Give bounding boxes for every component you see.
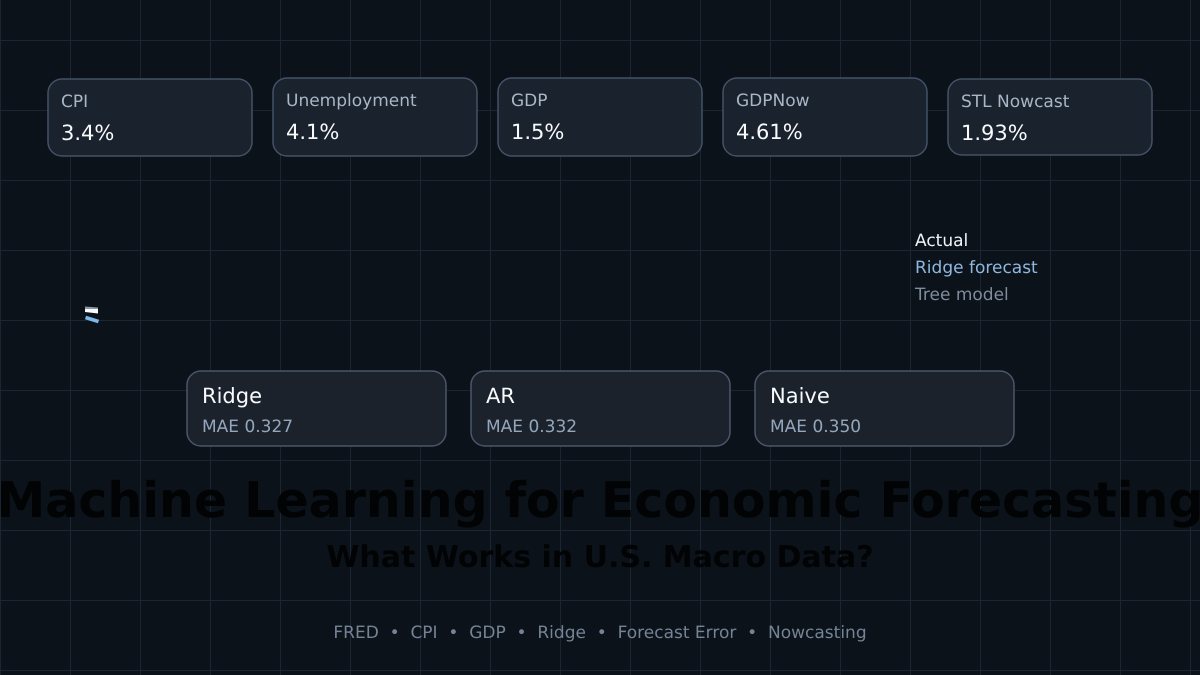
chart legend <box>914 231 1038 305</box>
panel: Ridge model card <box>187 371 446 446</box>
panel: STL Nowcast stat card: 1.93% <box>961 121 1028 145</box>
panel: Unemployment stat card <box>273 78 477 156</box>
chart legend: Actual <box>915 231 968 251</box>
panel: Unemployment stat card: Unemployment <box>286 91 417 111</box>
panel: CPI stat card <box>48 79 252 156</box>
panel: Naive model card <box>755 371 1014 446</box>
panel: STL Nowcast stat card: STL Nowcast <box>961 92 1070 112</box>
panel: AR model card: AR <box>486 384 515 408</box>
panel: GDP stat card <box>498 78 702 156</box>
chart legend: Tree model <box>914 285 1009 305</box>
panel: AR model card: MAE 0.332 <box>486 417 577 437</box>
panel: Naive model card: MAE 0.350 <box>770 417 861 437</box>
panel: STL Nowcast stat card <box>948 79 1152 155</box>
panel: CPI stat card: 3.4% <box>61 121 114 145</box>
panel: GDPNow stat card <box>723 78 927 156</box>
subtitle: What Works in U.S. Macro Data? <box>326 540 874 575</box>
chart legend: Ridge forecast <box>915 258 1038 278</box>
panel: GDP stat card: GDP <box>511 91 548 111</box>
panel: Ridge model card: MAE 0.327 <box>202 417 293 437</box>
footer keywords: FRED • CPI • GDP • Ridge • Forecast Error • Nowcasting <box>333 623 867 643</box>
title: Machine Learning for Economic Forecasting <box>0 472 1200 529</box>
panel: Naive model card: Naive <box>770 384 830 408</box>
panel: AR model card <box>471 371 730 446</box>
panel: GDPNow stat card: GDPNow <box>736 91 810 111</box>
panel: GDP stat card: 1.5% <box>511 120 564 144</box>
panel: Ridge model card: Ridge <box>202 384 262 408</box>
panel: Unemployment stat card: 4.1% <box>286 120 339 144</box>
collapsed line chart <box>85 306 98 322</box>
panel: GDPNow stat card: 4.61% <box>736 120 803 144</box>
panel: CPI stat card: CPI <box>61 92 88 112</box>
